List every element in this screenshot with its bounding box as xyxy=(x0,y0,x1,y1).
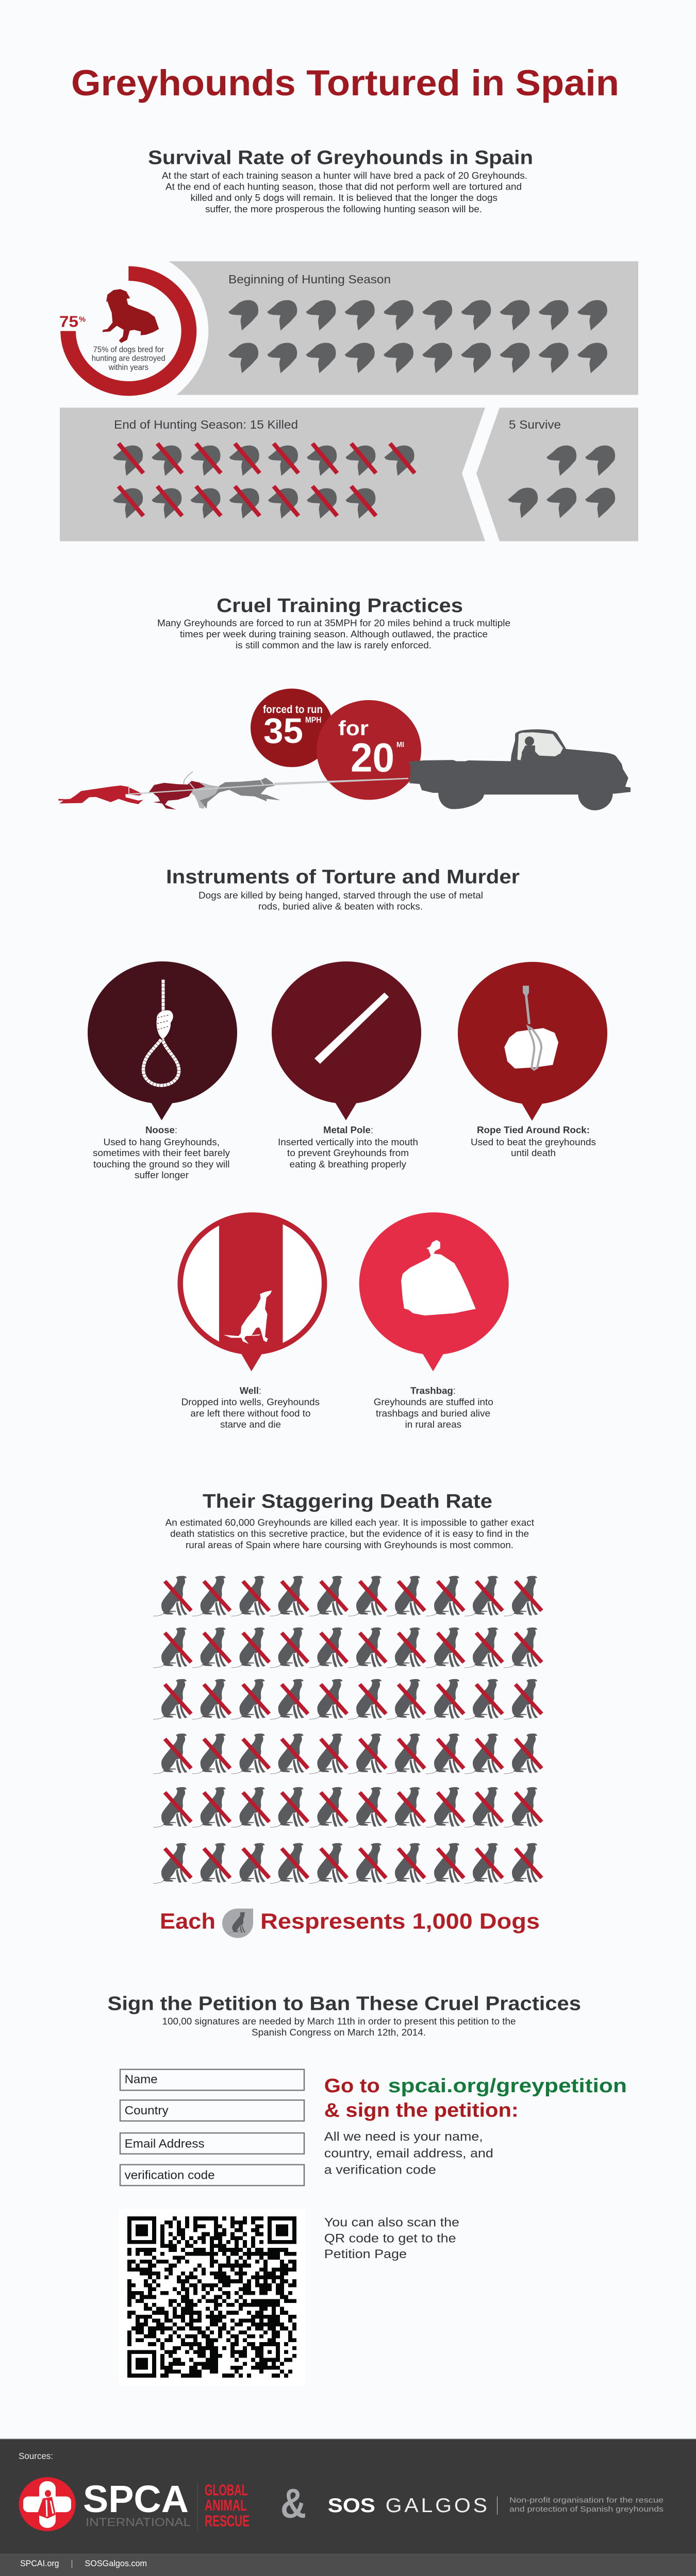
footer links: SOSGalgos.com xyxy=(85,2558,147,2568)
text block: survival intro: At the end of each hunting season, those that did not perform well are tortured and xyxy=(165,181,522,192)
caption: well: Dropped into wells, Greyhounds xyxy=(181,1397,320,1408)
footer links xyxy=(20,2558,147,2568)
logo: SPCA International: GLOBAL xyxy=(205,2481,248,2499)
caption: noose: Used to hang Greyhounds, xyxy=(103,1137,220,1147)
form field: verification code xyxy=(120,2165,304,2185)
form field: name xyxy=(120,2070,304,2090)
callout: 35 mph: forced to run xyxy=(263,703,323,716)
logo: SPCA International: INTERNATIONAL xyxy=(86,2516,191,2529)
illustration: dogs running behind truck xyxy=(58,730,631,810)
caption: trashbag: Trashbag: xyxy=(410,1385,456,1396)
caption: noose: sometimes with their feet barely xyxy=(93,1147,230,1158)
icon: SPCA cross emblem xyxy=(19,2477,76,2531)
caption: trashbag: Greyhounds are stuffed into xyxy=(374,1397,493,1408)
icon: light grey greyhound xyxy=(188,783,219,809)
heading: survival rate: Survival Rate of Greyhounds in Spain xyxy=(148,147,533,168)
text block: training intro xyxy=(157,618,510,650)
icon: pickup truck xyxy=(408,730,631,810)
call to action: Go to xyxy=(324,2075,380,2097)
stat: 75%: 75 xyxy=(59,313,78,330)
callout: 35 mph: MPH xyxy=(305,716,321,724)
caption: well: Well: xyxy=(240,1385,261,1396)
heading: instruments: Instruments of Torture and Murder xyxy=(166,866,520,888)
stat: percent sign: % xyxy=(79,316,86,324)
icon: dog in teardrop xyxy=(222,1908,253,1938)
icon grid: 5 surviving heads xyxy=(508,446,615,518)
icon: noose xyxy=(143,979,179,1086)
heading: cruel training: Cruel Training Practices xyxy=(217,595,463,617)
icon: maroon greyhound xyxy=(148,781,205,809)
logo: SPCA International xyxy=(19,2477,250,2531)
label: sources: Sources: xyxy=(19,2451,53,2461)
text block: death rate intro: rural areas of Spain where hare coursing with Greyhounds is most common. xyxy=(186,1539,513,1550)
caption: 75 percent destroyed: hunting are destroyed xyxy=(92,354,165,363)
caption: trashbag: trashbags and buried alive xyxy=(376,1408,490,1418)
icon: trashbag xyxy=(401,1240,476,1315)
logo: SPCA International: ANIMAL xyxy=(205,2497,247,2514)
panel: end of hunting season xyxy=(60,408,485,541)
text block: scan QR: QR code to get to the xyxy=(324,2232,456,2245)
footer xyxy=(0,2439,696,2576)
logo: SOS Galgos: and protection of Spanish greyhounds xyxy=(509,2505,664,2514)
section: petition xyxy=(107,1993,627,2386)
pin: trashbag xyxy=(359,1212,509,1371)
icon: metal pole xyxy=(314,993,389,1064)
caption: well: are left there without food to xyxy=(190,1408,310,1418)
pin: noose xyxy=(88,961,237,1120)
callout: 20 miles: for xyxy=(338,717,369,740)
text block: survival intro: killed and only 5 dogs will remain. It is believed that the longer the dogs xyxy=(191,192,498,203)
heading: petition: Sign the Petition to Ban These Cruel Practices xyxy=(107,1993,581,2014)
section: cruel training xyxy=(58,595,631,810)
icon: dog in well xyxy=(224,1291,272,1344)
icon: rock and rope xyxy=(504,986,558,1070)
pin: rope tied around rock xyxy=(458,962,607,1121)
donut chart: 75 percent xyxy=(59,266,196,396)
callout: 20 miles xyxy=(317,700,421,800)
text block: training intro: times per week during training season. Although outlawed, the practice xyxy=(180,629,488,639)
caption: rope and rock xyxy=(471,1125,596,1158)
icon: puppy silhouette xyxy=(102,289,159,343)
text block: instruments intro xyxy=(198,890,483,911)
logo: SPCA International: SPCA xyxy=(83,2478,189,2521)
form field: email xyxy=(120,2133,304,2154)
section: instruments of torture xyxy=(88,866,607,1430)
icon: red greyhound xyxy=(58,786,143,804)
icon: dog tail and leashes xyxy=(128,772,408,794)
callout: 20 miles: MI xyxy=(396,741,404,749)
footer links: SPCAI.org xyxy=(20,2558,59,2568)
text block: scan QR: You can also scan the xyxy=(324,2216,459,2229)
label: 15 killed: End of Hunting Season: 15 Killed xyxy=(114,418,298,431)
text block: petition intro: Spanish Congress on March 12th, 2014. xyxy=(252,2027,426,2038)
text block: what we need xyxy=(324,2130,493,2177)
text block: survival intro: At the start of each training season a hunter will have bred a pack of 20 Greyhounds. xyxy=(162,170,527,181)
logo: SOS Galgos: GALGOS xyxy=(386,2495,487,2517)
logo: SPCA International: RESCUE xyxy=(205,2512,250,2530)
caption: well xyxy=(181,1385,320,1430)
caption: 75 percent destroyed: within years xyxy=(108,363,148,372)
text block: training intro: is still common and the law is rarely enforced. xyxy=(236,640,432,650)
text block: petition intro xyxy=(162,2016,516,2038)
logo: SOS Galgos xyxy=(328,2495,664,2517)
legend: each dog represents 1,000 dogs xyxy=(160,1908,540,1938)
label: beginning of season: Beginning of Hunting Season xyxy=(228,273,391,286)
icon: grey greyhound xyxy=(200,777,280,809)
caption: noose xyxy=(93,1125,230,1180)
caption: noose: Noose: xyxy=(145,1125,177,1136)
form field: country: Country xyxy=(125,2104,169,2117)
caption: metal pole: Inserted vertically into the mouth xyxy=(278,1137,418,1147)
form field: country xyxy=(120,2100,304,2121)
ampersand: & xyxy=(280,2480,306,2527)
text block: survival intro: suffer, the more prosperous the following hunting season will be. xyxy=(205,204,482,214)
text block: death rate intro: death statistics on this secretive practice, but the evidence of it is easy to find in the xyxy=(170,1528,529,1539)
callout: 35 mph: 35 xyxy=(263,711,303,751)
section: survival rate xyxy=(59,147,638,541)
icon row: 10 dog heads xyxy=(228,300,607,331)
legend: each dog represents 1,000 dogs: Each xyxy=(160,1909,216,1934)
text block: instruments intro: Dogs are killed by being hanged, starved through the use of metal xyxy=(198,890,483,901)
caption: well: starve and die xyxy=(220,1419,281,1430)
logo: SOS Galgos: SOS xyxy=(328,2495,375,2517)
heading: death rate: Their Staggering Death Rate xyxy=(203,1490,492,1512)
section: death rate xyxy=(153,1490,543,1938)
legend: each dog represents 1,000 dogs: Respresents 1,000 Dogs xyxy=(260,1909,540,1934)
call to action: spcai.org/greypetition xyxy=(388,2075,627,2097)
caption: metal pole xyxy=(278,1125,418,1170)
text block: scan QR: Petition Page xyxy=(324,2248,407,2261)
caption: noose: touching the ground so they will xyxy=(93,1159,230,1170)
text block: survival intro xyxy=(162,170,527,214)
caption: trashbag: in rural areas xyxy=(405,1419,461,1430)
icon row: 10 more dog heads xyxy=(228,343,607,373)
text block: petition intro: 100,00 signatures are needed by March 11th in order to present this petition to the xyxy=(162,2016,516,2026)
caption: 75 percent destroyed xyxy=(92,346,165,372)
text block: what we need: country, email address, and xyxy=(324,2147,493,2160)
caption: 75 percent destroyed: 75% of dogs bred for xyxy=(93,346,164,354)
logo: SOS Galgos: Non-profit organisation for the rescue xyxy=(509,2497,664,2505)
text block: death rate intro: An estimated 60,000 Greyhounds are killed each year. It is impossible to gather exact xyxy=(165,1517,535,1528)
caption: noose: suffer longer xyxy=(135,1170,189,1180)
caption: rope and rock: until death xyxy=(511,1147,556,1158)
caption: metal pole: eating & breathing properly xyxy=(289,1159,407,1170)
icon grid: 15 crossed out heads xyxy=(113,444,415,519)
callout: 35 mph xyxy=(251,689,333,767)
call to action xyxy=(324,2075,627,2121)
panel: beginning of hunting season xyxy=(169,261,638,395)
caption: trashbag xyxy=(374,1385,493,1430)
QR code xyxy=(119,2209,305,2386)
call to action: & sign the petition: xyxy=(324,2099,519,2121)
text block: scan QR xyxy=(324,2216,459,2261)
pin: metal pole xyxy=(272,961,421,1120)
label: 5 survive: 5 Survive xyxy=(509,418,561,431)
callout: 20 miles: 20 xyxy=(351,735,394,781)
form field: email: Email Address xyxy=(125,2137,205,2150)
caption: rope and rock: Used to beat the greyhounds xyxy=(471,1137,596,1147)
panel: 5 survive xyxy=(476,408,638,541)
caption: metal pole: Metal Pole: xyxy=(323,1125,373,1136)
caption: rope and rock: Rope Tied Around Rock: xyxy=(477,1125,590,1136)
form field: name: Name xyxy=(125,2073,158,2086)
pin: well xyxy=(177,1212,327,1371)
text block: what we need: All we need is your name, xyxy=(324,2130,483,2144)
text block: what we need: a verification code xyxy=(324,2163,436,2177)
icon grid: 60 crossed out dogs xyxy=(153,1576,543,1884)
text block: training intro: Many Greyhounds are forced to run at 35MPH for 20 miles behind a truck multiple xyxy=(157,618,510,628)
form field: verification code: verification code xyxy=(125,2168,215,2181)
title: Greyhounds Tortured in Spain xyxy=(71,63,619,104)
caption: metal pole: to prevent Greyhounds from xyxy=(287,1147,409,1158)
text block: instruments intro: rods, buried alive & beaten with rocks. xyxy=(258,901,423,911)
text block: death rate intro xyxy=(165,1517,535,1550)
